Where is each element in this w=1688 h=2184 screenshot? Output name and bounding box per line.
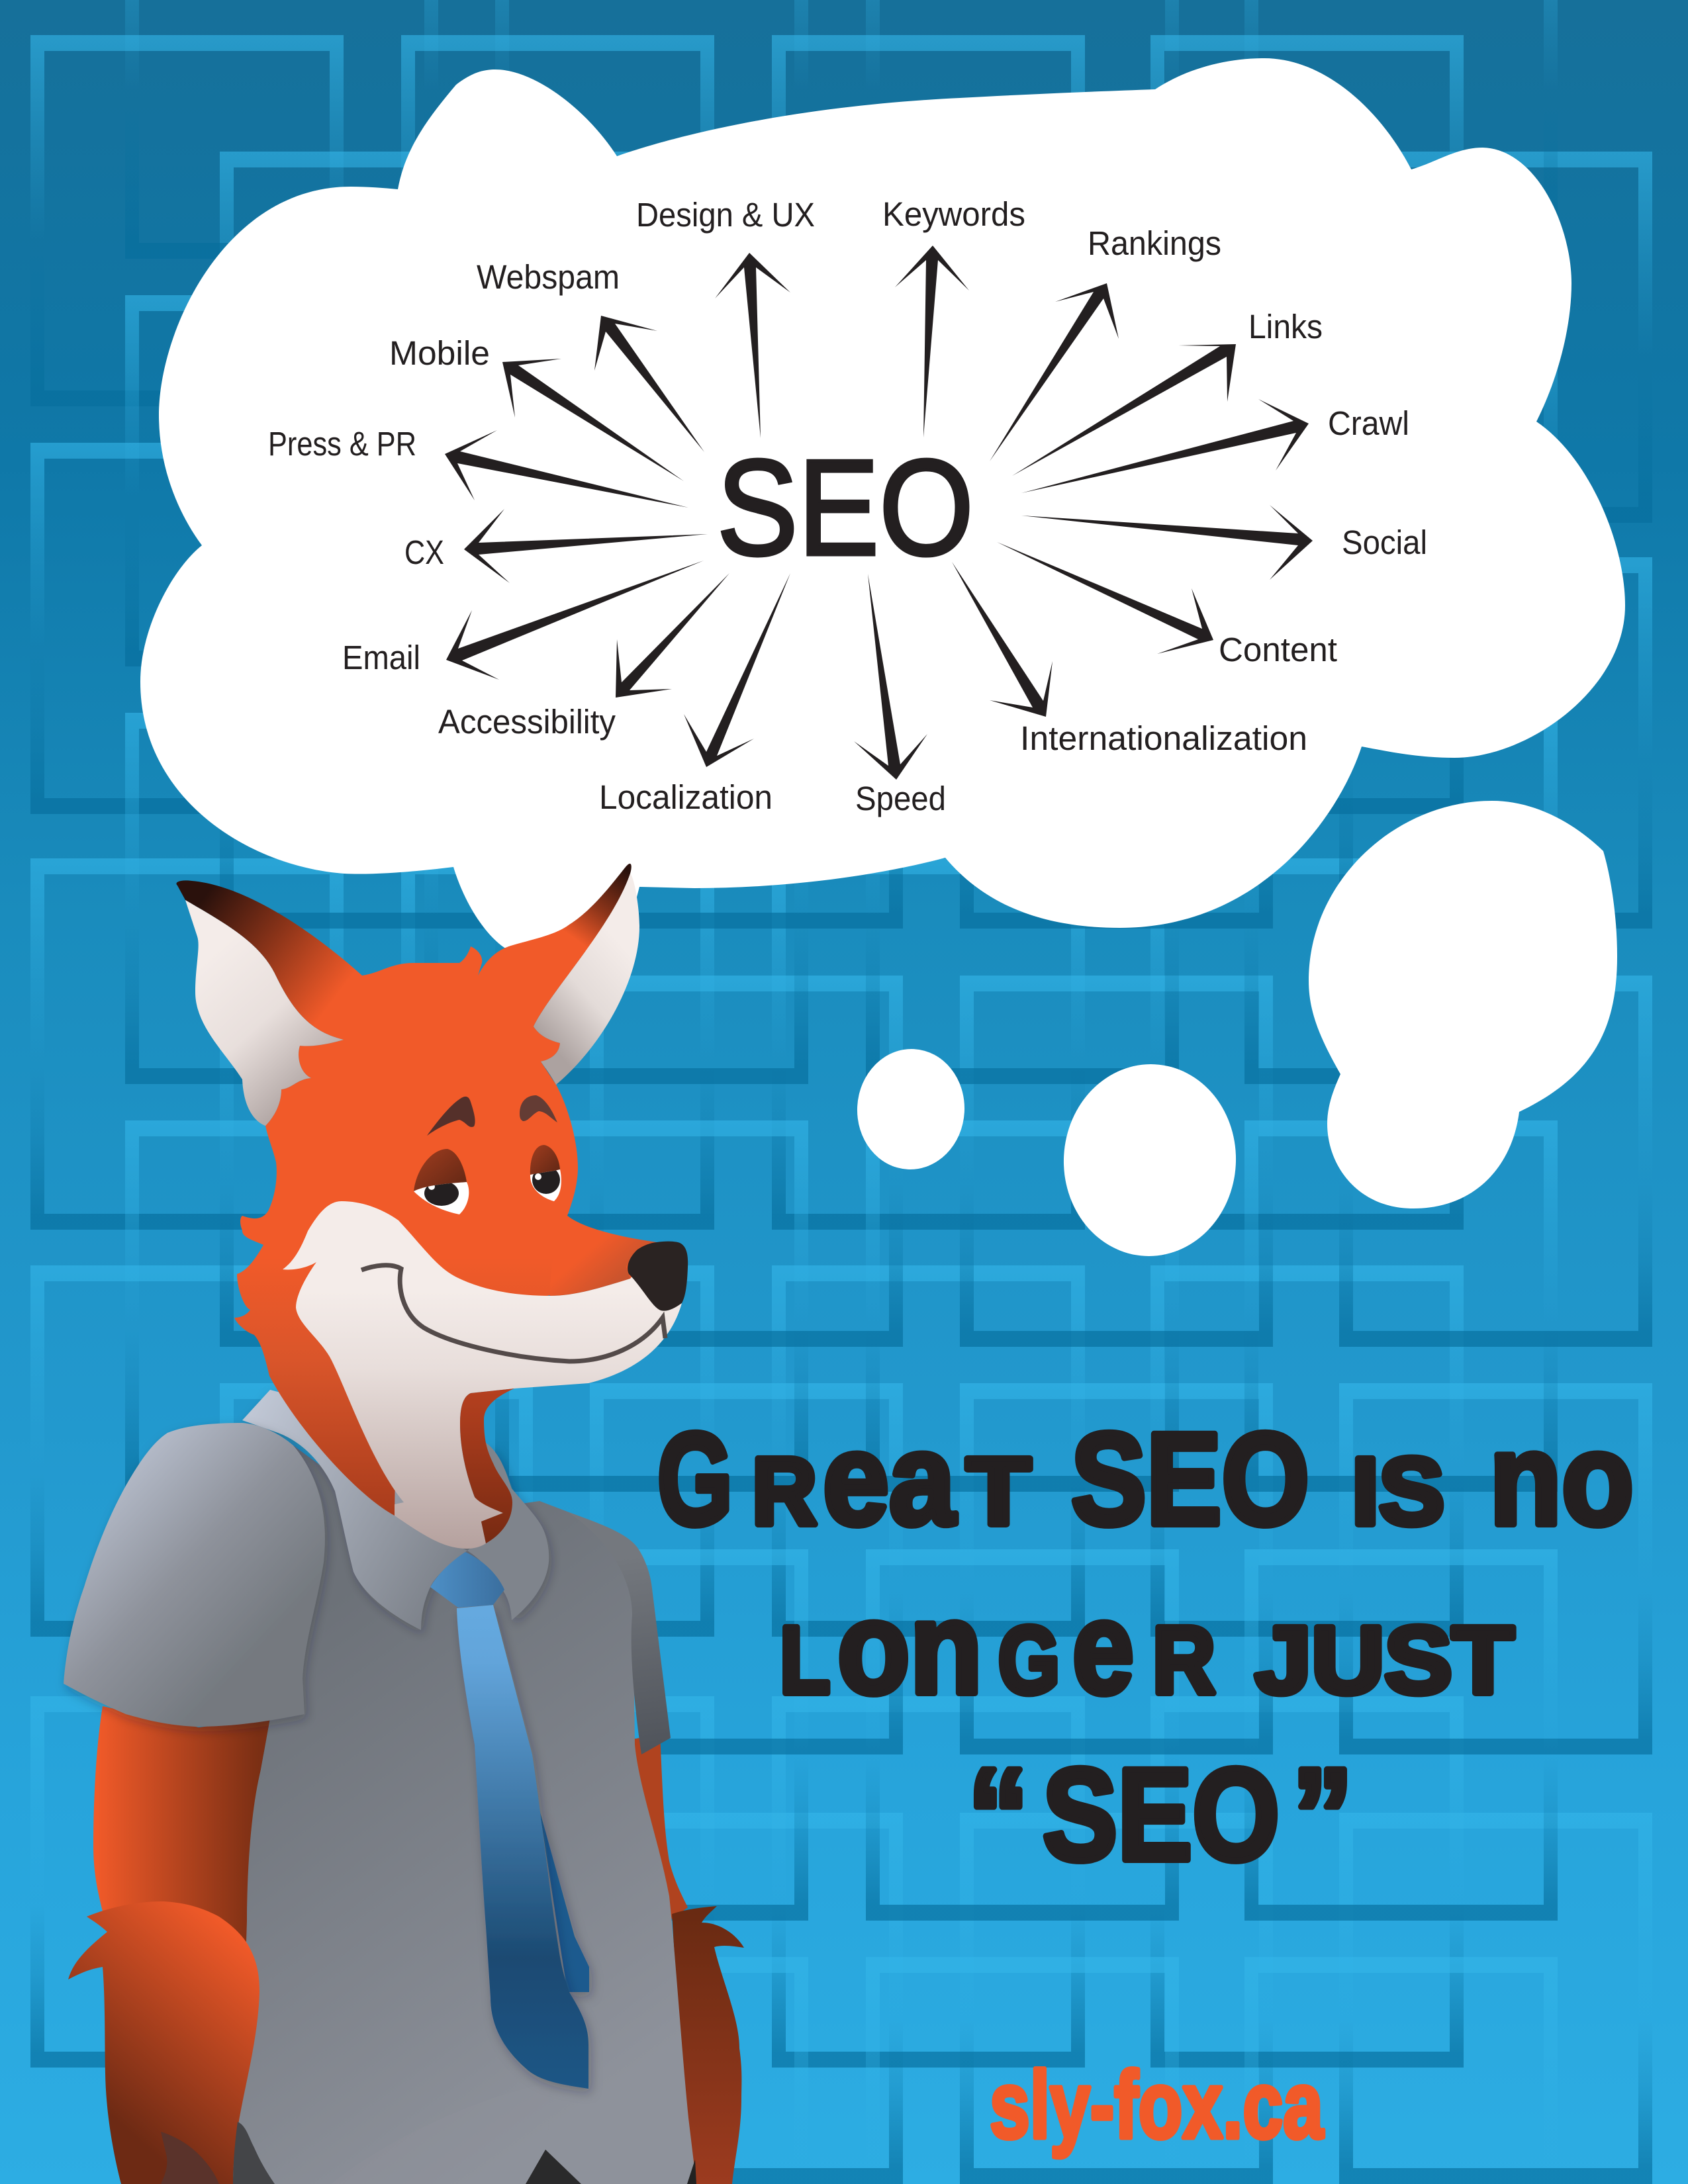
arrow: Links (1012, 344, 1236, 476)
snout shading (550, 1216, 657, 1296)
right sleeve (567, 1512, 671, 1754)
headline line 1: no (1489, 1406, 1634, 1552)
label: Speed: Speed (855, 780, 946, 817)
left upper arm (93, 1706, 270, 1942)
right eyeball (530, 1169, 561, 1201)
label: Keywords: Keywords (882, 195, 1025, 233)
arrow: Localization (684, 573, 790, 767)
arrows radiating from SEO (445, 246, 1313, 780)
right pupil (532, 1166, 560, 1194)
headline: Great SEO is no longer just "SEO" (657, 1406, 1634, 1888)
left eye (414, 1149, 469, 1214)
collar right flap (467, 1443, 549, 1620)
shirt collar (242, 1390, 549, 1630)
arrow: Email (446, 561, 704, 680)
headline line 1: R (752, 1438, 817, 1545)
right eyebrow (520, 1095, 557, 1122)
left eyelid (414, 1149, 467, 1191)
headline line 2: on (837, 1574, 982, 1721)
label: Design & UX: Design & UX (636, 196, 815, 234)
smile (361, 1265, 665, 1361)
headline line 2: JUST (1255, 1607, 1514, 1713)
label: Accessibility: Accessibility (438, 703, 616, 741)
headline line 2 (780, 1574, 1514, 1721)
right eye (530, 1145, 561, 1201)
label: Webspam: Webspam (477, 258, 620, 296)
headline line 2: G (998, 1607, 1060, 1713)
shirt body (233, 1445, 696, 2184)
collar left flap (242, 1390, 467, 1630)
label: Crawl: Crawl (1328, 404, 1409, 442)
left forearm and hand (68, 1901, 259, 2184)
label: CX: CX (404, 533, 444, 571)
white muzzle and neck (283, 1201, 682, 1549)
necktie knot (430, 1552, 504, 1608)
arrow: Webspam (594, 316, 704, 452)
arrow: Speed (854, 574, 927, 780)
headline line 2: L (780, 1607, 830, 1713)
arrow: Crawl (1021, 399, 1309, 493)
label: Mobile: Mobile (389, 334, 490, 372)
headline line 1 (657, 1406, 1634, 1552)
headline line 2: R (1152, 1607, 1215, 1713)
right arm (626, 1734, 688, 1919)
nose (628, 1242, 688, 1311)
label: Press & PR: Press & PR (268, 425, 416, 463)
necktie front blade (457, 1605, 588, 2089)
label: Content: Content (1219, 631, 1337, 668)
left ear outer (177, 880, 371, 1040)
shirt lower fold (331, 2083, 549, 2184)
headline line 3: “ (968, 1741, 1029, 1888)
left pupil (424, 1181, 459, 1206)
left sleeve (64, 1423, 325, 1727)
arrow: Keywords (895, 246, 969, 437)
fox character (64, 864, 744, 2184)
headline line 1: IS (1352, 1438, 1444, 1545)
arrow: Design & UX (715, 253, 790, 438)
thought cloud: medium bubble (1059, 1060, 1241, 1261)
thought cloud: large trailing bubble (1309, 801, 1617, 1208)
pants left (233, 2122, 275, 2184)
headline line 1: ea (823, 1406, 957, 1552)
headline line 2: e (1072, 1574, 1134, 1721)
headline line 3: SEO (1043, 1741, 1280, 1888)
arrow: Social (1021, 505, 1313, 580)
label: Email: Email (342, 639, 420, 676)
arrow: CX (464, 509, 708, 583)
right inner ear (534, 874, 639, 1085)
headline line 1: G (657, 1406, 733, 1552)
right ear outer (478, 864, 632, 1059)
left eyeball (414, 1182, 469, 1214)
label: Localization: Localization (599, 778, 773, 816)
neck fur (460, 1388, 514, 1543)
headline line 3: ” (1292, 1741, 1353, 1888)
pants center (526, 2150, 581, 2184)
hand fingers dark patch (161, 2132, 219, 2184)
label: Rankings: Rankings (1088, 224, 1221, 262)
pants right (687, 2160, 696, 2184)
arrow: Rankings (990, 283, 1119, 461)
left inner ear (185, 900, 344, 1126)
right eyelid (530, 1145, 560, 1175)
arrow: Accessibility (616, 573, 729, 698)
arrow: Content (997, 542, 1213, 654)
arrow: Internationalization (952, 562, 1053, 717)
label: Internationalization: Internationalization (1020, 719, 1307, 757)
left eyebrow (427, 1097, 475, 1136)
arrow: Mobile (502, 359, 684, 481)
headline line 1: T (966, 1438, 1031, 1545)
head fur (234, 946, 662, 1516)
label: Links: Links (1248, 308, 1323, 345)
necktie back blade (539, 1810, 589, 1992)
label: Social: Social (1342, 523, 1427, 561)
thought cloud: small bubble (854, 1046, 968, 1172)
headline line 1: SEO (1071, 1406, 1309, 1552)
right hand (672, 1906, 744, 2184)
SEO topic labels (268, 195, 1427, 817)
arrow: Press & PR (445, 430, 688, 508)
SEO center word: SEO (717, 432, 974, 584)
thought cloud: main bubble (140, 58, 1625, 953)
website url: sly-fox.ca (990, 2052, 1324, 2158)
